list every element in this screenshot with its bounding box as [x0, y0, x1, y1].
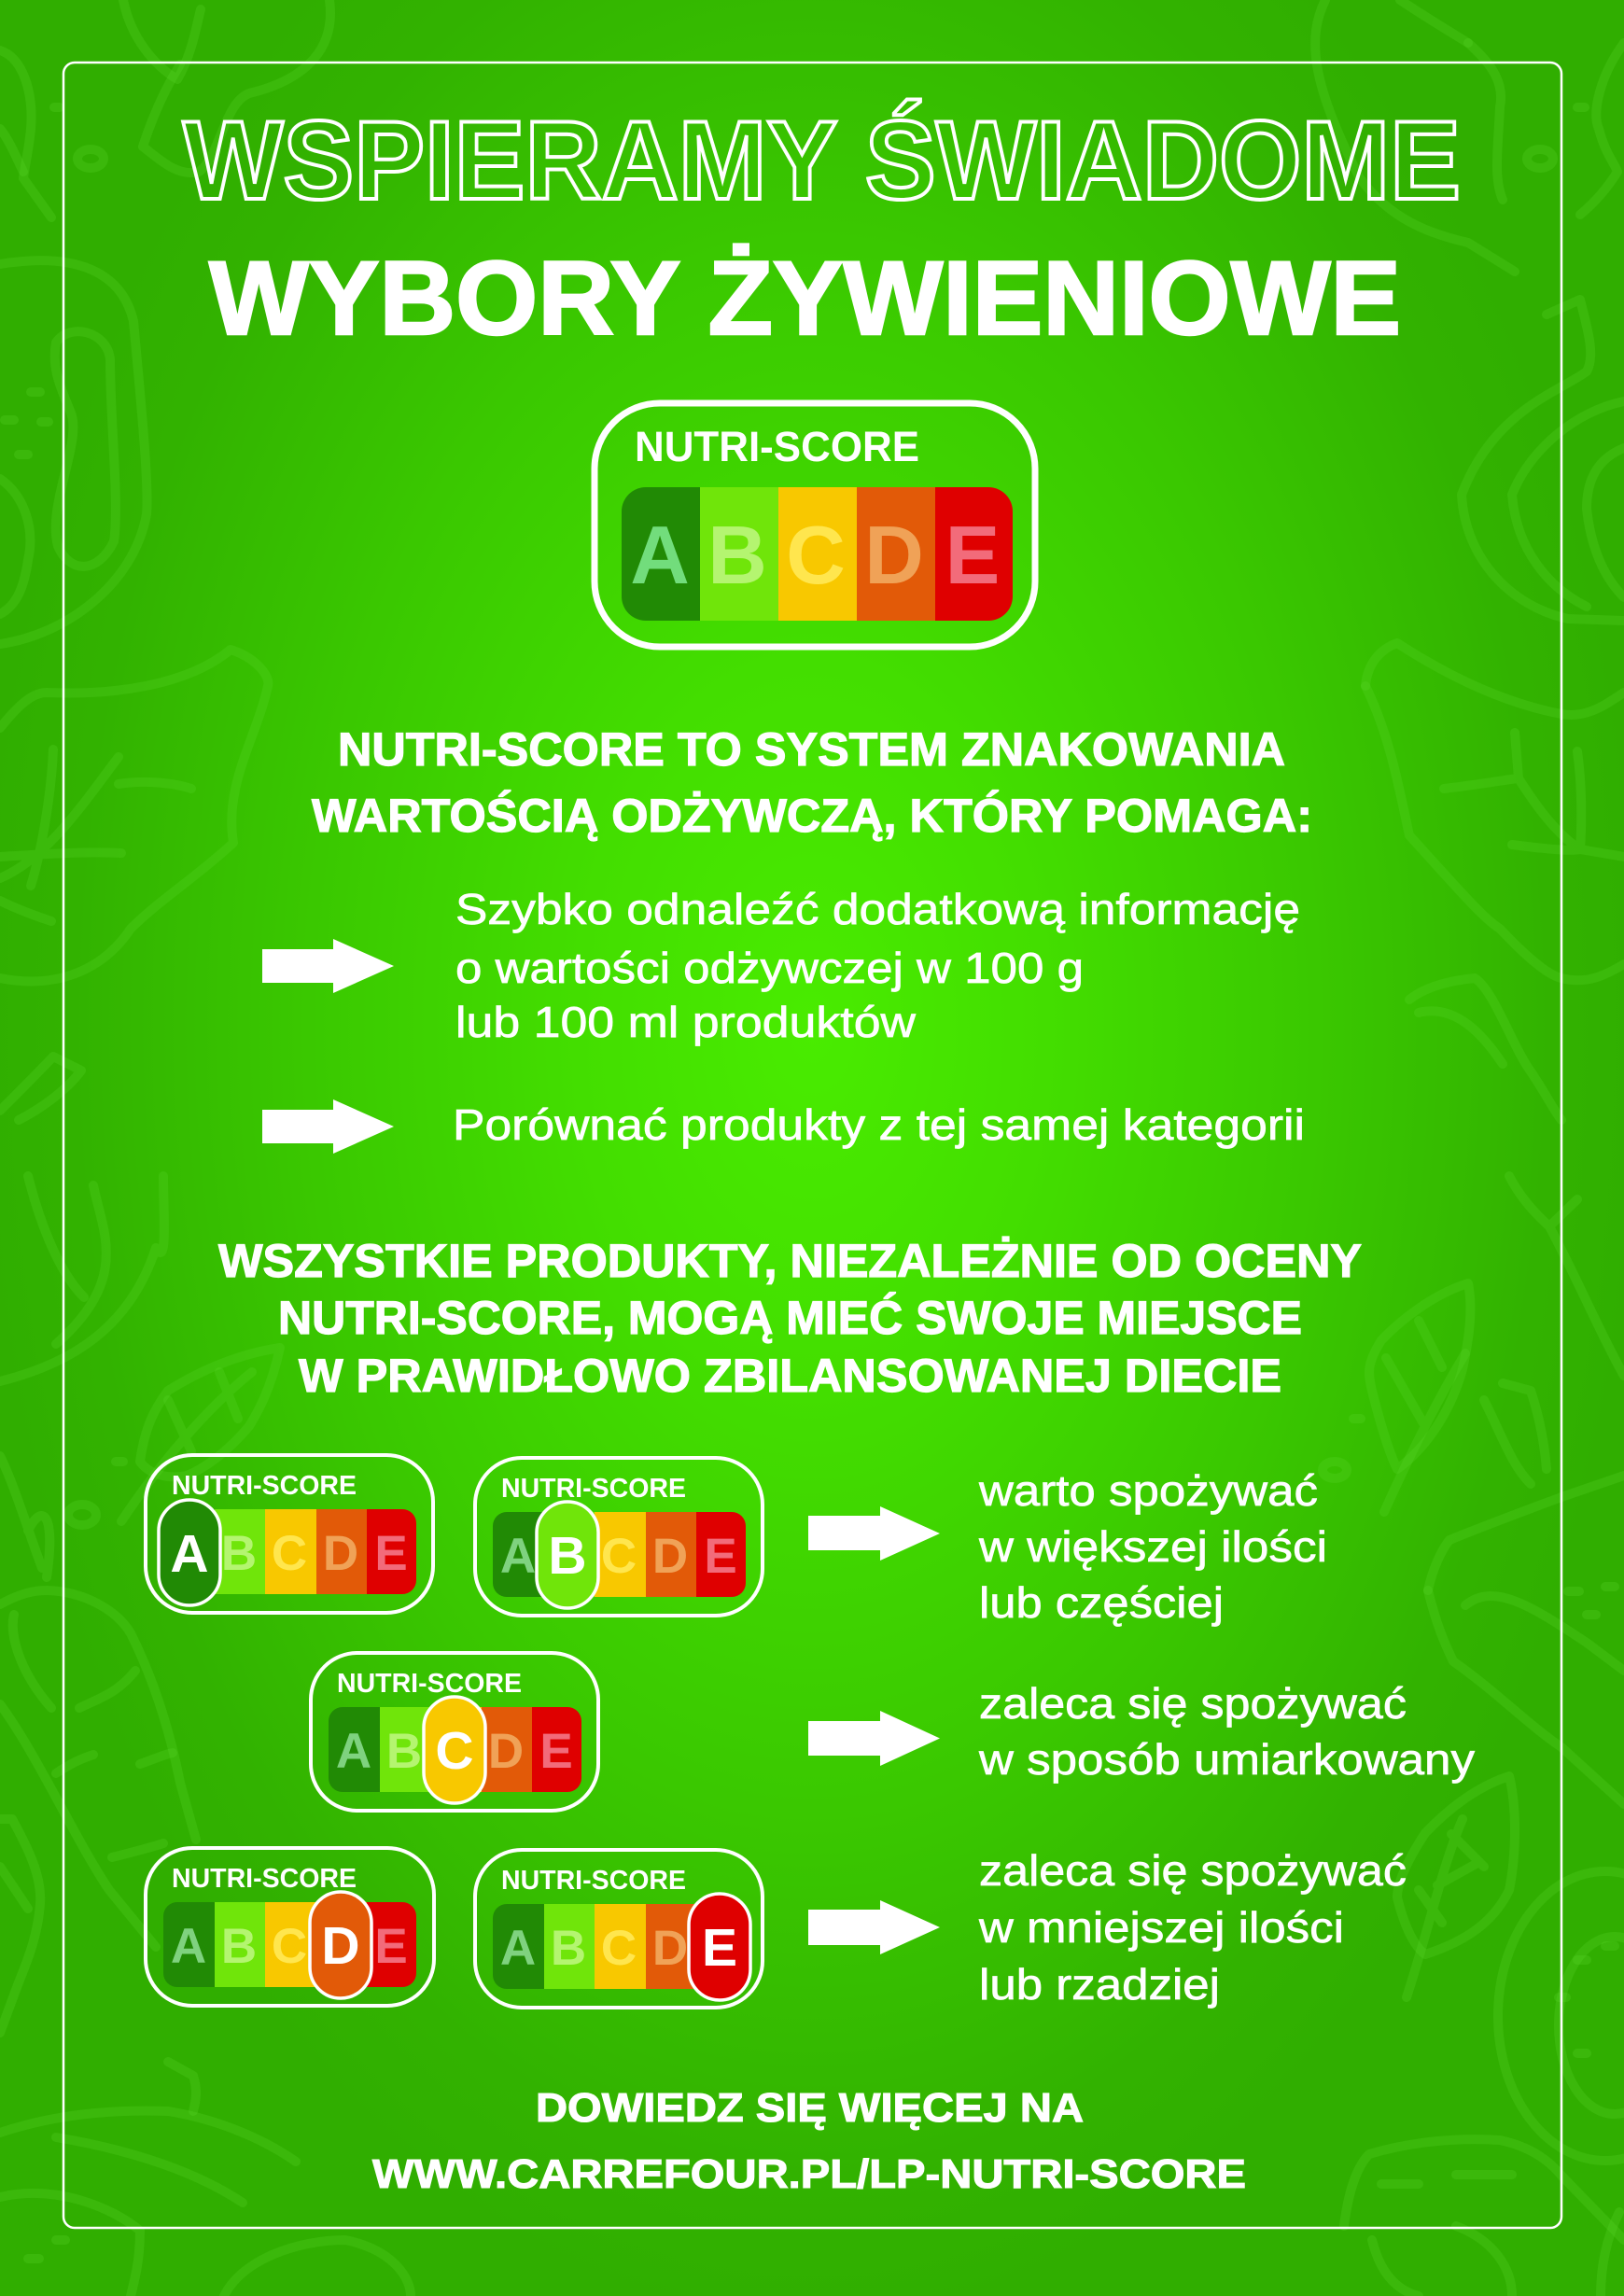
- heading: balanced diet: NUTRI-SCORE, MOGĄ MIEĆ SWOJE MIEJSCE: [278, 1292, 1302, 1344]
- badge: score D highlighted: NUTRI-SCORE: [172, 1864, 357, 1894]
- text: C advice: w sposób umiarkowany: [978, 1735, 1475, 1784]
- heading: what Nutri-Score is: WARTOŚCIĄ ODŻYWCZĄ, KTÓRY POMAGA:: [312, 790, 1312, 842]
- heading: balanced diet: WSZYSTKIE PRODUKTY, NIEZALEŻNIE OD OCENY: [218, 1235, 1362, 1287]
- arrow: second benefit: [262, 1099, 394, 1154]
- badge: score E highlighted: A: [500, 1921, 536, 1976]
- footer: link to more information: WWW.CARREFOUR.PL/LP-NUTRI-SCORE: [372, 2151, 1246, 2197]
- text: A and B advice: w większej ilości: [978, 1522, 1327, 1571]
- badge: score B highlighted: E: [704, 1529, 737, 1584]
- title: solid line: WYBORY ŻYWIENIOWE: [209, 240, 1401, 357]
- badge: score B highlighted: C: [601, 1529, 637, 1584]
- badge: score B highlighted: [475, 1458, 763, 1616]
- badge: score E highlighted: C: [601, 1921, 637, 1976]
- badge: score C highlighted: E: [539, 1724, 573, 1779]
- badge: score A highlighted: NUTRI-SCORE: [172, 1471, 357, 1501]
- badge: score A highlighted: [146, 1455, 433, 1613]
- badge: score C highlighted: D: [488, 1724, 524, 1779]
- text: first benefit: Szybko odnaleźć dodatkową informację: [455, 885, 1300, 933]
- text: D and E advice: lub rzadziej: [979, 1960, 1220, 2009]
- arrow: A and B advice: [808, 1506, 940, 1561]
- heading: balanced diet: [218, 1235, 1362, 1402]
- text: first benefit: lub 100 ml produktów: [455, 998, 917, 1046]
- text: second benefit: Porównać produkty z tej samej kategorii: [453, 1100, 1305, 1149]
- scale letters: [630, 509, 1000, 601]
- text: C advice: [978, 1679, 1475, 1784]
- badge: score E highlighted: NUTRI-SCORE: [501, 1866, 686, 1896]
- badge: score A highlighted: D: [323, 1526, 358, 1581]
- heading: what Nutri-Score is: [312, 723, 1312, 842]
- text: D and E advice: [978, 1846, 1407, 2009]
- text: first benefit: [455, 885, 1300, 1046]
- badge: score D highlighted: C: [272, 1919, 307, 1974]
- arrow: D and E advice: [808, 1900, 940, 1954]
- text: A and B advice: [978, 1466, 1327, 1627]
- arrow: C advice: [808, 1711, 940, 1766]
- badge: score B highlighted: A: [500, 1529, 536, 1584]
- badge label: NUTRI-SCORE: [635, 423, 919, 470]
- text: A and B advice: lub częściej: [979, 1578, 1224, 1627]
- badge: score C highlighted: NUTRI-SCORE: [337, 1669, 522, 1699]
- badge: score E highlighted: E: [702, 1918, 737, 1978]
- badge: score C highlighted: C: [435, 1721, 474, 1781]
- badge: score D highlighted: A: [171, 1919, 206, 1974]
- text: first benefit: o wartości odżywczej w 100 g: [455, 944, 1084, 992]
- heading: what Nutri-Score is: NUTRI-SCORE TO SYSTEM ZNAKOWANIA: [338, 723, 1285, 776]
- badge: score A highlighted: C: [272, 1526, 307, 1581]
- badge: score B highlighted: NUTRI-SCORE: [501, 1474, 686, 1504]
- badge: score D highlighted: [146, 1848, 434, 2006]
- text: C advice: zaleca się spożywać: [979, 1679, 1407, 1728]
- scale letters: E: [945, 509, 1000, 601]
- badge: score E highlighted: [475, 1850, 763, 2008]
- footer: link to more information: [372, 2085, 1246, 2197]
- badge: score C highlighted: [311, 1653, 598, 1811]
- arrow: first benefit: [262, 939, 394, 993]
- badge: score D highlighted: B: [221, 1919, 257, 1974]
- badge: score D highlighted: D: [321, 1916, 360, 1976]
- text: A and B advice: warto spożywać: [978, 1466, 1318, 1515]
- A to E colour scale: [622, 487, 1013, 621]
- scale letters: A: [630, 509, 690, 601]
- badge: score E highlighted: B: [551, 1921, 586, 1976]
- badge: score B highlighted: D: [652, 1529, 688, 1584]
- scale letters: B: [707, 509, 767, 601]
- badge: score B highlighted: B: [548, 1526, 587, 1586]
- badge: score C highlighted: A: [336, 1724, 371, 1779]
- heading: balanced diet: W PRAWIDŁOWO ZBILANSOWANEJ DIECIE: [299, 1350, 1281, 1402]
- badge: score E highlighted: D: [652, 1921, 688, 1976]
- badge: score A highlighted: E: [374, 1526, 408, 1581]
- badge: score A highlighted: A: [170, 1524, 209, 1584]
- footer: link to more information: DOWIEDZ SIĘ WIĘCEJ NA: [536, 2085, 1084, 2131]
- scale letters: C: [786, 509, 846, 601]
- text: D and E advice: w mniejszej ilości: [978, 1903, 1344, 1952]
- badge: score C highlighted: B: [386, 1724, 422, 1779]
- badge: score D highlighted: E: [374, 1919, 408, 1974]
- title: outlined line: WSPIERAMY ŚWIADOME: [183, 98, 1461, 223]
- scale letters: D: [864, 509, 924, 601]
- text: D and E advice: zaleca się spożywać: [979, 1846, 1407, 1895]
- badge: score A highlighted: B: [221, 1526, 257, 1581]
- main Nutri-Score badge: [595, 403, 1035, 647]
